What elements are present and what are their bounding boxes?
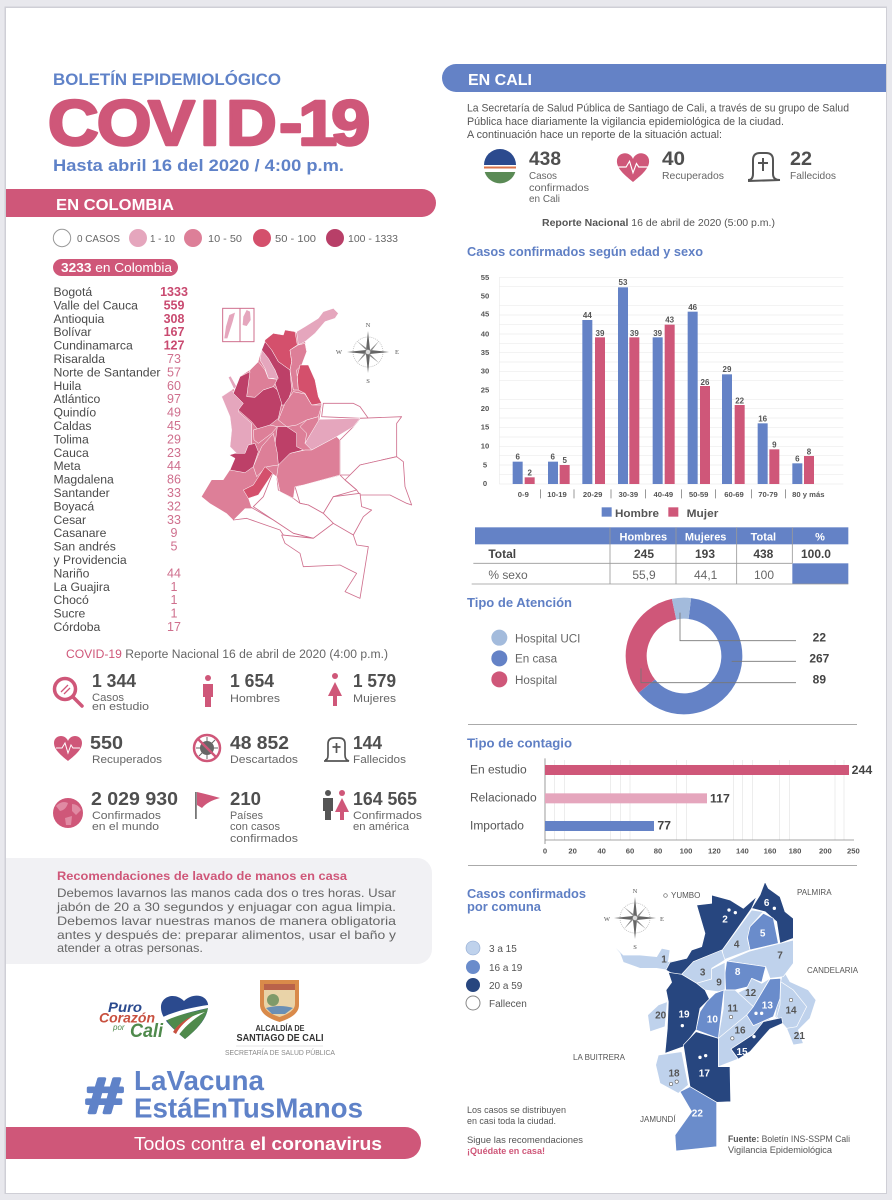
list: cases by department: 559 bbox=[164, 298, 184, 312]
table: totales por sexo bbox=[472, 527, 848, 584]
comuna numbers: 20 bbox=[655, 1010, 667, 1021]
logo: puro corazon por cali: por bbox=[112, 1023, 125, 1032]
heading: boletin: BOLETÍN EPIDEMIOLÓGICO bbox=[53, 70, 281, 89]
stat: casos cali: en Cali bbox=[529, 193, 560, 205]
comuna numbers: 11 bbox=[727, 1004, 738, 1015]
list: cases by department: 1 bbox=[171, 580, 178, 594]
bar chart: tipo de contagio: 0 bbox=[543, 846, 547, 855]
stat: confirmados mundo bbox=[53, 789, 178, 833]
list: cases by department: Risaralda bbox=[54, 352, 105, 366]
list: cases by department: San andrés bbox=[54, 540, 116, 554]
panel: header bbox=[48, 70, 370, 175]
comuna numbers: 13 bbox=[762, 1000, 773, 1011]
stat: casos en estudio: Casos bbox=[92, 692, 125, 704]
list: cases by department: Cesar bbox=[54, 513, 86, 527]
stat: casos cali bbox=[484, 149, 589, 205]
stat: mujeres: Mujeres bbox=[353, 693, 397, 705]
bar chart: edad y sexo: 22 bbox=[735, 396, 745, 405]
recommendations body: antes y después de: preparar alimentos, usar el baño y bbox=[57, 928, 396, 942]
bar chart: tipo de contagio: 117 bbox=[710, 792, 730, 806]
stat: mujeres: 1 579 bbox=[353, 671, 396, 691]
table: totales por sexo: 100 bbox=[754, 568, 774, 582]
table: totales por sexo: 55,9 bbox=[632, 568, 656, 582]
stat: recuperados cali bbox=[617, 149, 724, 182]
panel: cali stats bbox=[484, 149, 836, 205]
list: cases by department: 45 bbox=[167, 419, 181, 433]
comuna numbers: 14 bbox=[785, 1005, 797, 1016]
stat: mujeres bbox=[328, 671, 397, 706]
list: cases by department: 57 bbox=[167, 365, 181, 379]
table: totales por sexo: % bbox=[815, 532, 825, 544]
heading: casos por comuna: Casos confirmados bbox=[467, 887, 586, 901]
bar chart: edad y sexo: 39 bbox=[653, 329, 663, 338]
stat: fallecidos cali: 22 bbox=[790, 149, 812, 170]
stat: confirmados mundo: 2 029 930 bbox=[91, 789, 178, 809]
table: totales por sexo: 44,1 bbox=[694, 568, 718, 582]
place names: JAMUNDÍ bbox=[640, 1115, 676, 1124]
note: distribucion: Los casos se distribuyen bbox=[467, 1105, 566, 1115]
recommendations body: atender a otras personas. bbox=[57, 941, 203, 955]
bar chart: edad y sexo: 0 bbox=[483, 479, 487, 488]
logo: puro corazon por cali: Corazón bbox=[99, 1010, 155, 1026]
stat: hombres: 1 654 bbox=[230, 671, 274, 691]
stat: fallecidos: Fallecidos bbox=[353, 754, 407, 766]
heading: tipo de contagio: Tipo de contagio bbox=[467, 736, 572, 750]
table: totales por sexo: % sexo bbox=[488, 568, 528, 582]
stat: recuperados cali: 40 bbox=[662, 149, 685, 170]
comuna legend: 3 a 15 bbox=[489, 944, 517, 955]
table: totales por sexo: 193 bbox=[695, 547, 715, 561]
bar chart: edad y sexo: 45 bbox=[481, 310, 490, 319]
comuna numbers: 12 bbox=[745, 988, 757, 999]
list: cases by department: 17 bbox=[167, 620, 181, 634]
bar chart: tipo de contagio: 120 bbox=[708, 846, 721, 855]
list: cases by department: Córdoba bbox=[54, 620, 100, 634]
list: cases by department: 308 bbox=[164, 312, 184, 326]
stat: casos cali: 438 bbox=[529, 149, 561, 170]
recommendations body bbox=[56, 886, 396, 955]
pill: total colombia: 3233 en Colombia bbox=[61, 261, 172, 275]
table: totales por sexo: 245 bbox=[634, 547, 654, 561]
bar chart: edad y sexo: 44 bbox=[583, 311, 592, 320]
icon: compass colombia: E bbox=[395, 349, 399, 356]
list: cases by department: Norte de Santander bbox=[54, 365, 160, 379]
banner: en colombia: EN COLOMBIA bbox=[56, 197, 174, 214]
logo: alcaldia de santiago de cali: SANTIAGO DE CALI bbox=[236, 1033, 324, 1044]
date line: Hasta abril 16 del 2020 / 4:00 p.m. bbox=[53, 157, 344, 175]
chart legend bbox=[602, 507, 719, 520]
icon: compass colombia: N bbox=[366, 322, 371, 329]
comuna legend bbox=[466, 941, 527, 1010]
chart legend: Mujer bbox=[687, 508, 719, 520]
list: cases by department: 44 bbox=[167, 566, 181, 580]
map legend bbox=[53, 229, 398, 247]
list: cases by department: La Guajira bbox=[54, 580, 110, 594]
list: cases by department: 167 bbox=[164, 325, 184, 339]
stat: recuperados bbox=[54, 733, 163, 766]
stat: hombres: Hombres bbox=[230, 693, 281, 705]
list: cases by department: 127 bbox=[164, 339, 184, 353]
stat: descartados: Descartados bbox=[230, 754, 299, 766]
table: totales por sexo: Mujeres bbox=[685, 532, 726, 544]
stat: confirmados mundo: en el mundo bbox=[92, 821, 159, 833]
stat: fallecidos cali bbox=[748, 149, 836, 182]
bar chart: tipo de contagio: 80 bbox=[654, 846, 662, 855]
bar chart: edad y sexo: 40 bbox=[481, 329, 489, 338]
list: cases by department: Nariño bbox=[54, 566, 90, 580]
table: totales por sexo: Hombres bbox=[620, 532, 667, 544]
comuna legend: Fallecen bbox=[489, 999, 527, 1010]
stat: fallecidos bbox=[324, 733, 407, 766]
list: cases by department: 1333 bbox=[160, 285, 188, 299]
bar chart: tipo de contagio: 160 bbox=[764, 846, 776, 855]
icon: compass cali bbox=[604, 888, 664, 951]
stat: confirmados america bbox=[323, 789, 423, 833]
map: comunas de cali bbox=[610, 882, 816, 1151]
bar chart: tipo de contagio: 244 bbox=[852, 763, 872, 777]
icon: compass colombia bbox=[336, 322, 399, 385]
recommendations heading: Recomendaciones de lavado de manos en casa bbox=[57, 869, 347, 883]
place names: CANDELARIA bbox=[807, 966, 859, 975]
stat: recuperados: 550 bbox=[90, 733, 123, 753]
recommendations body: jabón de 20 a 30 segundos y enjuagar con agua limpia. bbox=[56, 900, 396, 914]
bar chart: tipo de contagio: 250 bbox=[847, 846, 860, 855]
bar chart: tipo de contagio: Relacionado bbox=[470, 791, 537, 805]
bar chart: edad y sexo: 6 bbox=[515, 452, 520, 461]
list: cases by department bbox=[54, 285, 188, 634]
comuna legend: 16 a 19 bbox=[489, 963, 523, 974]
bar chart: edad y sexo: 10 bbox=[481, 441, 489, 450]
comuna numbers: 5 bbox=[760, 929, 766, 940]
bar chart: edad y sexo: 70-79 bbox=[758, 490, 778, 499]
stat: recuperados: Recuperados bbox=[92, 754, 163, 766]
bar chart: edad y sexo: 39 bbox=[596, 329, 605, 338]
panel: recomendaciones bbox=[6, 858, 432, 964]
banner: todos contra el coronavirus: Todos contra el coronavirus bbox=[134, 1133, 382, 1154]
bar chart: edad y sexo: 20 bbox=[481, 404, 489, 413]
intro paragraph: Pública hace diariamente la vigilancia epidemiológica de la ciudad. bbox=[467, 116, 784, 128]
table: totales por sexo: 100.0 bbox=[801, 547, 831, 561]
bar chart: edad y sexo: 15 bbox=[481, 423, 490, 432]
list: cases by department: 60 bbox=[167, 379, 181, 393]
heading: casos por edad y sexo: Casos confirmados según edad y sexo bbox=[467, 245, 703, 259]
bar chart: edad y sexo: 80 y más bbox=[792, 490, 825, 499]
bar chart: edad y sexo: 50-59 bbox=[689, 490, 708, 499]
comuna numbers: 4 bbox=[734, 940, 740, 951]
comuna numbers: 3 bbox=[700, 968, 706, 979]
bar chart: tipo de contagio: 100 bbox=[680, 846, 692, 855]
bar chart: edad y sexo: 25 bbox=[481, 385, 490, 394]
banner: en cali: EN CALI bbox=[468, 72, 532, 89]
list: cases by department: 73 bbox=[167, 352, 181, 366]
stat: recuperados cali: Recuperados bbox=[662, 170, 724, 182]
comuna numbers: 15 bbox=[736, 1047, 748, 1058]
list: cases by department: y Providencia bbox=[54, 553, 127, 567]
comuna numbers: 10 bbox=[707, 1015, 718, 1026]
report caption cali: Reporte Nacional 16 de abril de 2020 (5:00 p.m.) bbox=[542, 217, 775, 229]
heading: tipo de atencion: Tipo de Atención bbox=[467, 596, 572, 610]
bar chart: tipo de contagio: 140 bbox=[736, 846, 749, 855]
bar chart: edad y sexo: 40-49 bbox=[654, 490, 673, 499]
stat: confirmados america: Confirmados bbox=[353, 810, 423, 822]
donut legend: Hospital UCI bbox=[515, 632, 580, 645]
stat: paises: 210 bbox=[230, 789, 261, 809]
stat: fallecidos: 144 bbox=[353, 733, 382, 753]
stat: confirmados america: en américa bbox=[353, 821, 410, 833]
list: cases by department: Magdalena bbox=[54, 473, 114, 487]
comuna numbers: 6 bbox=[764, 898, 770, 909]
logo: puro corazon por cali: Puro bbox=[108, 999, 142, 1015]
bar chart: edad y sexo: 43 bbox=[665, 315, 675, 324]
map: colombia bbox=[202, 308, 412, 598]
bar chart: edad y sexo: 9 bbox=[772, 441, 777, 450]
comuna numbers: 17 bbox=[699, 1069, 710, 1080]
bar chart: edad y sexo: 30 bbox=[481, 367, 489, 376]
logo: puro corazon por cali: Cali bbox=[130, 1021, 164, 1042]
hashtag: la vacuna esta en tus manos: LaVacuna bbox=[134, 1065, 264, 1096]
list: cases by department: Meta bbox=[54, 459, 81, 473]
banner: todos contra el coronavirus bbox=[6, 1127, 421, 1159]
list: cases by department: Antioquia bbox=[54, 312, 105, 326]
bar chart: edad y sexo: 2 bbox=[527, 468, 532, 477]
comuna numbers: 7 bbox=[777, 950, 783, 961]
donut legend: Hospital bbox=[515, 674, 557, 687]
list: cases by department: Cundinamarca bbox=[54, 339, 133, 353]
bar chart: tipo de contagio: 200 bbox=[819, 846, 832, 855]
list: cases by department: Bolívar bbox=[54, 325, 91, 339]
map legend: 1 - 10 bbox=[150, 233, 175, 245]
bar chart: edad y sexo: 0-9 bbox=[518, 490, 529, 499]
comuna numbers: 8 bbox=[735, 967, 741, 978]
map legend: 0 CASOS bbox=[77, 233, 120, 245]
list: cases by department: 29 bbox=[167, 432, 181, 446]
list: cases by department: 86 bbox=[167, 473, 181, 487]
stat: casos en estudio: 1 344 bbox=[92, 671, 136, 691]
stat: hombres bbox=[203, 671, 281, 707]
bar chart: edad y sexo: 8 bbox=[807, 447, 812, 456]
bar chart: edad y sexo: 6 bbox=[795, 454, 800, 463]
banner: en cali bbox=[442, 64, 886, 92]
stat: paises: Países bbox=[230, 810, 263, 822]
recommendations body: Debemos lavarnos las manos cada dos o tres horas. Usar bbox=[57, 886, 396, 900]
table: totales por sexo: Total bbox=[751, 532, 776, 544]
bar chart: edad y sexo bbox=[481, 273, 843, 520]
heading: casos por comuna bbox=[467, 887, 586, 914]
stat: descartados bbox=[194, 733, 299, 766]
bar chart: tipo de contagio: 40 bbox=[597, 846, 606, 855]
bar chart: tipo de contagio: 180 bbox=[789, 846, 801, 855]
banner: en colombia bbox=[6, 189, 436, 217]
recommendations body: Debemos lavar nuestras manos de manera obligatoria bbox=[57, 914, 396, 928]
bar chart: edad y sexo: 29 bbox=[723, 365, 732, 374]
hashtag: la vacuna esta en tus manos: # bbox=[86, 1068, 123, 1124]
note: distribucion: en casi toda la ciudad. bbox=[467, 1116, 556, 1126]
list: cases by department: Caldas bbox=[54, 419, 91, 433]
list: cases by department: 23 bbox=[167, 446, 181, 460]
chart legend: Hombre bbox=[615, 508, 659, 520]
place names: PALMIRA bbox=[797, 888, 832, 897]
stat: fallecidos cali: Fallecidos bbox=[790, 170, 836, 182]
bar chart: edad y sexo: 20-29 bbox=[583, 490, 602, 499]
logo: alcaldia de santiago de cali: ALCALDÍA DE bbox=[256, 1024, 305, 1033]
source: Fuente: Boletín INS-SSPM Cali bbox=[728, 1134, 850, 1144]
bar chart: edad y sexo: 50 bbox=[481, 291, 489, 300]
list: cases by department: 33 bbox=[167, 513, 181, 527]
stat: casos en estudio: en estudio bbox=[92, 701, 149, 713]
icon: compass colombia: S bbox=[366, 378, 370, 385]
panel: national stats bbox=[53, 671, 423, 845]
bar chart: edad y sexo: 55 bbox=[481, 273, 490, 282]
donut chart: tipo de atencion: 267 bbox=[809, 651, 830, 665]
list: cases by department: Cauca bbox=[54, 446, 89, 460]
list: cases by department: 9 bbox=[171, 526, 178, 540]
bar chart: edad y sexo: 6 bbox=[550, 452, 555, 461]
hashtag: la vacuna esta en tus manos: EstáEnTusManos bbox=[134, 1092, 363, 1124]
comuna dots bbox=[669, 907, 793, 1086]
list: cases by department: Bogotá bbox=[54, 285, 92, 299]
title: COVID-19 bbox=[48, 88, 370, 159]
bar chart: tipo de contagio: 77 bbox=[657, 818, 671, 832]
logo: alcaldia de santiago de cali: SECRETARÍA DE SALUD PÚBLICA bbox=[225, 1048, 335, 1057]
stat: paises: confirmados bbox=[230, 833, 299, 845]
map legend: 10 - 50 bbox=[208, 233, 242, 245]
comuna numbers: 2 bbox=[722, 915, 728, 926]
bar chart: edad y sexo: 26 bbox=[701, 378, 710, 387]
icon: compass cali: E bbox=[660, 916, 664, 923]
bar chart: edad y sexo: 10-19 bbox=[547, 490, 567, 499]
inset: san andres y providencia bbox=[223, 308, 254, 342]
list: cases by department: 32 bbox=[167, 499, 181, 513]
intro paragraph: La Secretaría de Salud Pública de Santiago de Cali, a través de su grupo de Salud bbox=[467, 102, 849, 114]
comuna numbers: 19 bbox=[678, 1009, 690, 1020]
stat: casos en estudio bbox=[54, 671, 149, 713]
icon: compass cali: N bbox=[633, 888, 638, 895]
icon: compass cali: W bbox=[604, 916, 611, 923]
list: cases by department: 33 bbox=[167, 486, 181, 500]
note: distribucion bbox=[467, 1105, 584, 1156]
source: Vigilancia Epidemiológica bbox=[728, 1145, 832, 1155]
dividers bbox=[468, 724, 857, 866]
comuna numbers bbox=[655, 898, 805, 1120]
logo: puro corazon por cali bbox=[99, 996, 208, 1042]
map legend: 50 - 100 bbox=[275, 233, 316, 245]
place names: YUMBO bbox=[671, 891, 700, 900]
bar chart: edad y sexo: 16 bbox=[758, 414, 768, 423]
table: totales por sexo: 438 bbox=[753, 547, 774, 561]
bar chart: edad y sexo: 5 bbox=[562, 456, 567, 465]
stat: paises: con casos bbox=[230, 821, 281, 833]
list: cases by department: 1 bbox=[171, 593, 178, 607]
bar chart: edad y sexo: 39 bbox=[630, 329, 639, 338]
donut chart: tipo de atencion bbox=[491, 608, 830, 704]
intro paragraph: A continuación hace un reporte de la situación actual: bbox=[467, 129, 722, 141]
bar chart: tipo de contagio: Importado bbox=[470, 818, 524, 832]
intro paragraph bbox=[467, 102, 849, 141]
list: cases by department: 1 bbox=[171, 607, 178, 621]
comuna numbers: 9 bbox=[716, 978, 722, 989]
donut legend bbox=[491, 630, 580, 687]
stat: paises bbox=[195, 789, 299, 845]
bar chart: edad y sexo: 35 bbox=[481, 348, 490, 357]
donut chart: tipo de atencion: 22 bbox=[813, 631, 826, 645]
comuna numbers: 18 bbox=[668, 1069, 680, 1080]
stat: descartados: 48 852 bbox=[230, 733, 289, 753]
report caption colombia: COVID-19 Reporte Nacional 16 de abril de 2020 (4:00 p.m.) bbox=[66, 649, 388, 661]
list: cases by department: Valle del Cauca bbox=[54, 298, 138, 312]
place names bbox=[573, 888, 859, 1124]
hashtag: la vacuna esta en tus manos bbox=[86, 1065, 363, 1124]
list: cases by department: Boyacá bbox=[54, 499, 94, 513]
stat: confirmados america: 164 565 bbox=[353, 789, 417, 809]
source bbox=[728, 1134, 850, 1155]
table: totales por sexo: Total bbox=[488, 547, 516, 561]
list: cases by department: 49 bbox=[167, 406, 181, 420]
donut legend: En casa bbox=[515, 653, 558, 666]
note: distribucion: ¡Quédate en casa! bbox=[467, 1146, 545, 1156]
place names: LA BUITRERA bbox=[573, 1053, 626, 1062]
comuna legend: 20 a 59 bbox=[489, 981, 523, 992]
list: cases by department: Huila bbox=[54, 379, 81, 393]
note: distribucion: Sigue las recomendaciones bbox=[467, 1135, 584, 1145]
stat: casos cali: Casos bbox=[529, 170, 557, 182]
bar chart: tipo de contagio bbox=[470, 758, 872, 855]
list: cases by department: 97 bbox=[167, 392, 181, 406]
donut chart: tipo de atencion: 89 bbox=[813, 673, 826, 687]
logo: alcaldia de santiago de cali bbox=[225, 980, 335, 1057]
comuna numbers: 16 bbox=[734, 1025, 746, 1036]
pill: total colombia bbox=[53, 259, 178, 276]
list: cases by department: Chocó bbox=[54, 593, 89, 607]
bar chart: tipo de contagio: 60 bbox=[626, 846, 634, 855]
list: cases by department: Tolima bbox=[54, 432, 89, 446]
list: cases by department: Santander bbox=[54, 486, 110, 500]
list: cases by department: 5 bbox=[171, 540, 178, 554]
bar chart: tipo de contagio: 20 bbox=[568, 846, 577, 855]
map legend: 100 - 1333 bbox=[348, 233, 398, 245]
comuna numbers: 21 bbox=[794, 1031, 805, 1042]
bar chart: edad y sexo: 53 bbox=[619, 278, 628, 287]
list: cases by department: Casanare bbox=[54, 526, 107, 540]
bar chart: edad y sexo: 60-69 bbox=[724, 490, 744, 499]
comuna numbers: 1 bbox=[661, 954, 667, 965]
stat: confirmados mundo: Confirmados bbox=[92, 810, 162, 822]
bar chart: edad y sexo: 46 bbox=[688, 303, 698, 312]
icon: compass colombia: W bbox=[336, 349, 343, 356]
stat: casos cali: confirmados bbox=[529, 182, 589, 194]
icon: compass cali: S bbox=[633, 944, 637, 951]
list: cases by department: Sucre bbox=[54, 607, 86, 621]
bar chart: tipo de contagio: En estudio bbox=[470, 762, 527, 776]
list: cases by department: 44 bbox=[167, 459, 181, 473]
list: cases by department: Quindío bbox=[54, 406, 96, 420]
bar chart: edad y sexo: 30-39 bbox=[619, 490, 638, 499]
list: cases by department: Atlántico bbox=[54, 392, 100, 406]
bar chart: edad y sexo: 5 bbox=[483, 460, 488, 469]
heading: casos por comuna: por comuna bbox=[467, 900, 542, 914]
comuna numbers: 22 bbox=[692, 1109, 703, 1120]
